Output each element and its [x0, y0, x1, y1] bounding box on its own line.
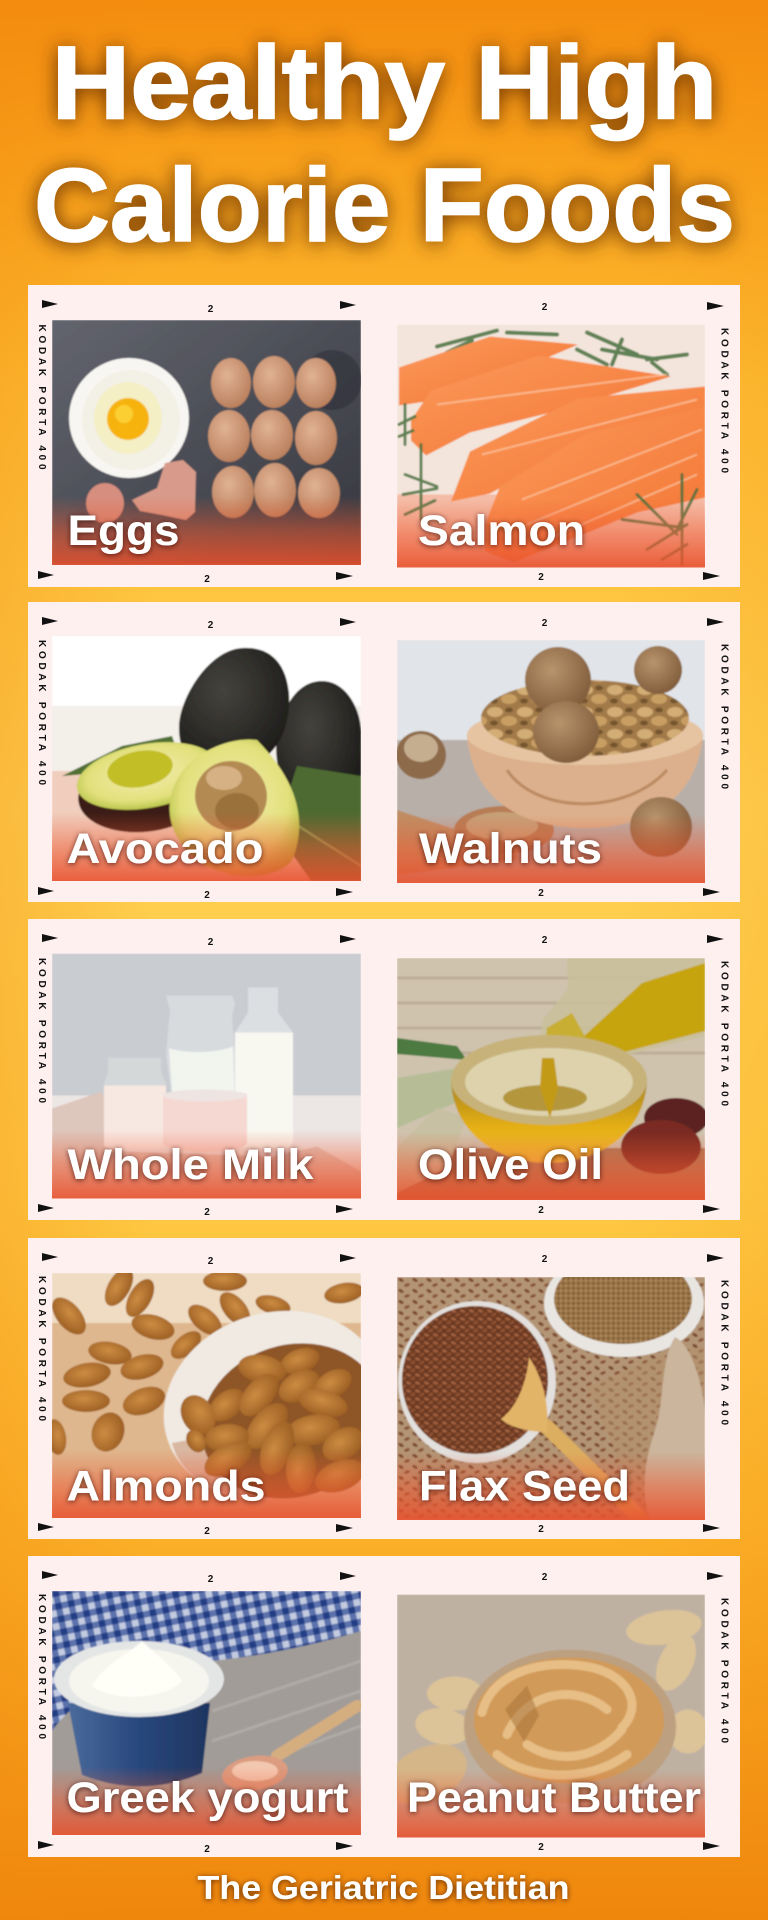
label: Whole Milk: Whole Milk	[68, 1141, 314, 1189]
film frame markers	[36, 617, 730, 901]
film frame markers: KODAK PORTA 400	[718, 1280, 730, 1425]
film frame markers: 2	[208, 1256, 214, 1267]
film frame markers: 2	[208, 1574, 214, 1585]
film frame markers: 2	[542, 1572, 548, 1583]
photo: peanut butter	[397, 1594, 705, 1838]
label: Flax Seed: Flax Seed	[419, 1462, 630, 1510]
film frame markers: 2	[538, 1205, 544, 1216]
film frame markers: 2	[538, 1524, 544, 1535]
footer credit: The Geriatric Dietitian	[198, 1869, 570, 1906]
film frame markers: 2	[538, 888, 544, 899]
film frame markers: 2	[204, 1526, 210, 1537]
film frame markers	[36, 1253, 730, 1537]
label: Olive Oil: Olive Oil	[418, 1141, 603, 1189]
photo: whole milk	[52, 954, 361, 1198]
film frame markers: 2	[204, 1844, 210, 1855]
photo: flax seed	[397, 1277, 705, 1520]
film frame markers: 2	[208, 304, 214, 315]
photo: almonds	[52, 1273, 361, 1518]
film frame markers: 2	[538, 1842, 544, 1853]
title: Calorie Foods	[34, 148, 735, 264]
film frame markers: KODAK PORTA 400	[718, 1598, 730, 1743]
label: Salmon: Salmon	[418, 507, 585, 555]
photo: greek yogurt	[52, 1591, 361, 1835]
label: Almonds: Almonds	[66, 1462, 266, 1510]
film frame markers	[36, 934, 730, 1218]
film frame markers: KODAK PORTA 400	[718, 961, 730, 1106]
film frame markers: 2	[542, 618, 548, 629]
film frame markers: 2	[204, 574, 210, 585]
film frame markers: 2	[542, 935, 548, 946]
panel: row 1 eggs and salmon	[28, 285, 740, 587]
label: Walnuts: Walnuts	[419, 825, 602, 873]
label: Avocado: Avocado	[66, 825, 264, 873]
panel: row 3 whole milk and olive oil	[28, 919, 740, 1220]
film frame markers: KODAK PORTA 400	[36, 958, 47, 1103]
film frame markers: KODAK PORTA 400	[36, 640, 47, 785]
film frame markers: KODAK PORTA 400	[718, 644, 730, 789]
photo: avocado	[52, 636, 361, 881]
title: Healthy High	[52, 26, 717, 142]
label: Peanut Butter: Peanut Butter	[407, 1774, 701, 1822]
panel: row 5 greek yogurt and peanut butter	[28, 1556, 740, 1857]
film frame markers: KODAK PORTA 400	[36, 1594, 47, 1739]
photo: olive oil	[397, 958, 705, 1200]
label: Eggs: Eggs	[68, 507, 180, 555]
film frame markers: 2	[208, 937, 214, 948]
film frame markers: 2	[204, 890, 210, 901]
panel: row 4 almonds and flax seed	[28, 1238, 740, 1539]
photo: salmon	[397, 324, 705, 568]
title	[34, 26, 735, 264]
film frame markers: 2	[542, 302, 548, 313]
photo: eggs	[52, 320, 361, 565]
film frame markers: 2	[542, 1254, 548, 1265]
film frame markers: KODAK PORTA 400	[36, 324, 47, 470]
film frame markers: 2	[538, 572, 544, 583]
panel: row 2 avocado and walnuts	[28, 602, 740, 902]
film frame markers	[36, 1571, 730, 1855]
film frame markers: 2	[204, 1207, 210, 1218]
film frame markers: KODAK PORTA 400	[36, 1276, 47, 1421]
film frame markers: 2	[208, 620, 214, 631]
label: Greek yogurt: Greek yogurt	[66, 1774, 348, 1822]
film frame markers	[36, 300, 730, 585]
film frame markers: KODAK PORTA 400	[718, 328, 730, 473]
photo: walnuts	[397, 640, 705, 883]
